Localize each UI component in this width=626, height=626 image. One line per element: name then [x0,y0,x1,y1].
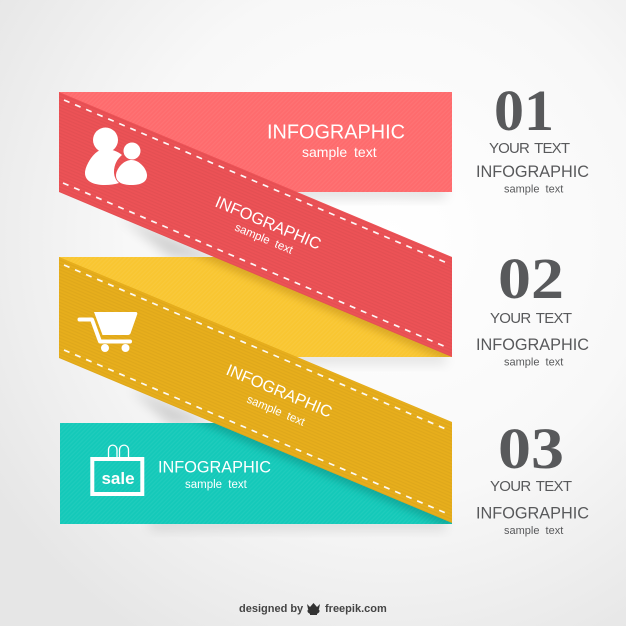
text: yellow band sample text: sample text [245,394,307,429]
heading: red band title: INFOGRAPHIC [212,193,324,254]
block: item 03 [476,416,589,537]
block: item 01: INFOGRAPHIC [476,163,589,181]
heading: teal banner title: INFOGRAPHIC [158,458,271,476]
panel: red diagonal band [59,92,452,357]
block: item 03: sample text [504,525,563,537]
heading: yellow band title: INFOGRAPHIC [223,361,335,422]
block: item 01: YOUR TEXT [489,140,570,157]
block: item 02: INFOGRAPHIC [476,336,589,354]
block: item 01 [476,78,589,196]
heading: red banner title: INFOGRAPHIC [267,122,405,144]
block: item 01: sample text [504,184,563,196]
footer: credit [239,603,387,615]
panel: teal flat banner [60,423,452,530]
stitching: red band top [64,100,447,263]
block: item 02: YOUR TEXT [490,310,572,327]
block: item 01: 01 [494,78,554,143]
stitching: yellow band top [64,265,448,430]
text: red banner sample text: sample text [302,144,377,160]
block: item 02: 02 [498,246,564,311]
shadow: yellow band on background [130,388,218,425]
shadow: yellow band on teal [193,423,452,524]
footer: credit: designed by [239,603,304,615]
panel: yellow flat banner [59,257,452,364]
block: item 03: YOUR TEXT [490,478,572,495]
block: item 02: sample text [504,356,563,368]
block: item 03: INFOGRAPHIC [476,504,589,522]
text: teal banner sample text: sample text [185,479,248,491]
panel: yellow diagonal band [59,257,452,523]
block: item 02 [476,246,589,368]
icon: people [85,128,147,185]
text: red band sample text: sample text [233,222,295,257]
stitching: red band bottom [63,183,446,347]
shadow: red band on background [120,216,232,263]
stitching: yellow band bottom [64,350,448,514]
block: item 03: 03 [498,416,564,481]
icon: sale bag: sale [101,469,135,488]
icon: freepik crown [307,603,320,615]
panel: red flat banner [59,92,452,198]
icon: shopping cart [80,312,137,352]
shadow: red band on yellow [194,257,452,357]
icon: sale bag [92,445,142,494]
footer: credit: freepik.com [325,603,387,615]
